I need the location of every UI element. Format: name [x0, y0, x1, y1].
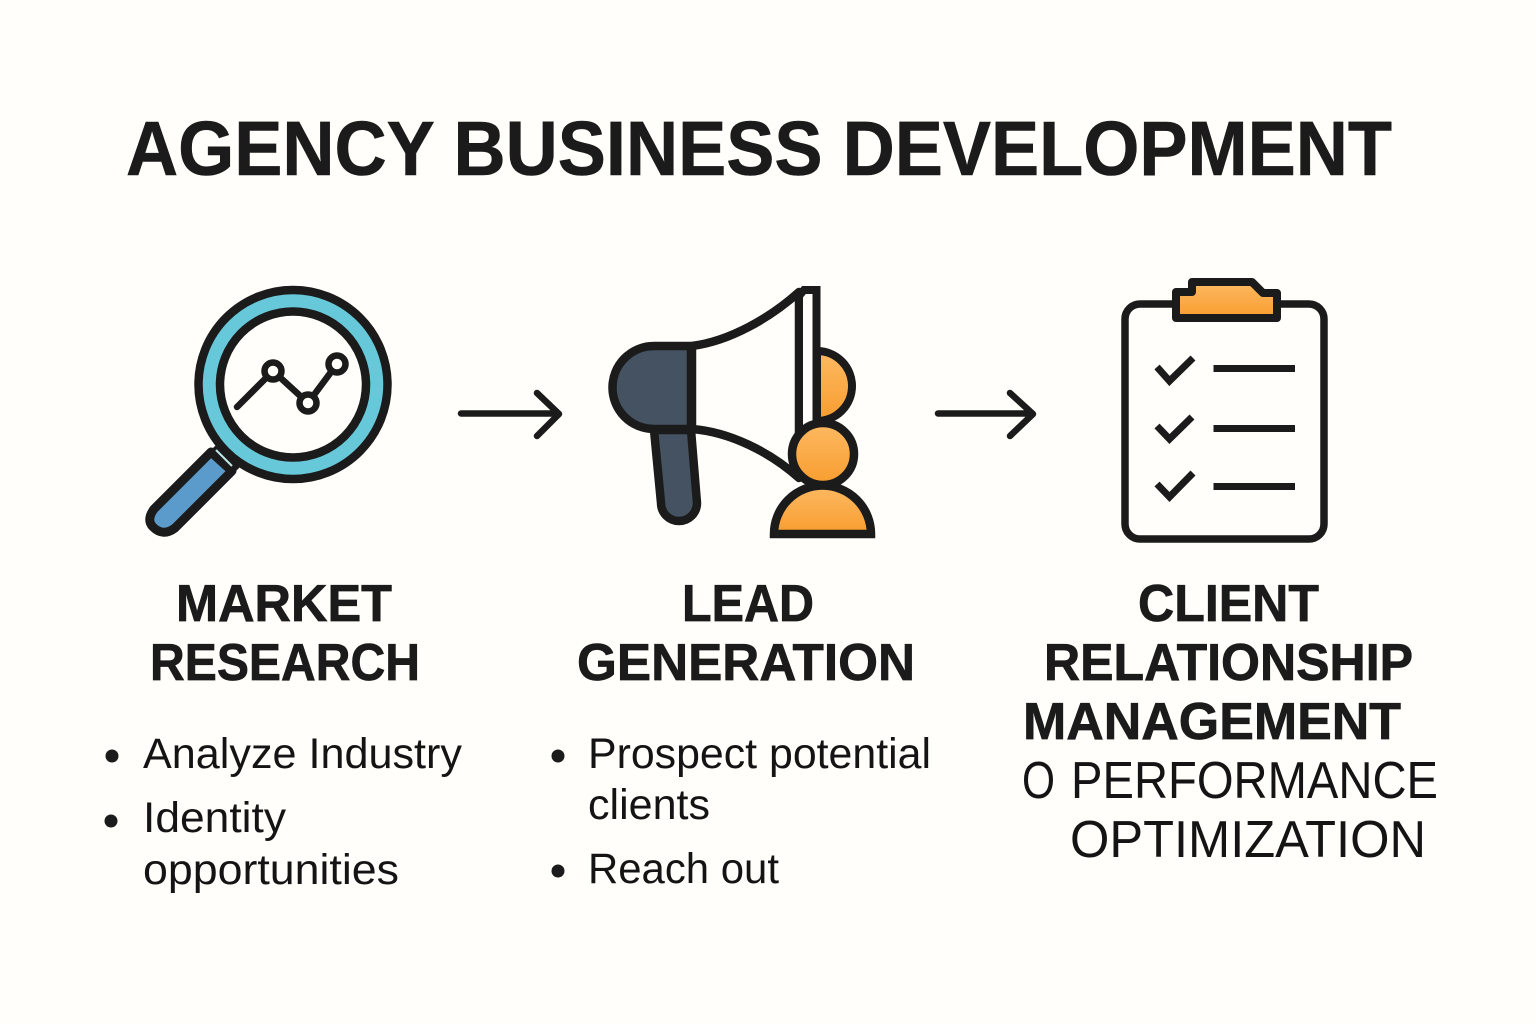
sub-item: performance optimization: O [1022, 752, 1055, 810]
person body [774, 486, 871, 534]
line chart in lens [237, 356, 346, 412]
list: market research: Identity [143, 794, 287, 842]
megaphone horn [692, 292, 799, 478]
person head behind megaphone [817, 351, 852, 421]
heading: lead generation: LEAD [682, 575, 814, 633]
list: market research [104, 730, 462, 894]
clipboard board [1125, 304, 1324, 539]
icon: clipboard checklist [1125, 282, 1324, 539]
heading: lead generation: GENERATION [577, 634, 915, 692]
heading: client relationship management: MANAGEMENT [1023, 693, 1401, 751]
heading: client relationship management: CLIENT [1138, 575, 1319, 633]
checklist row 3 [1157, 473, 1295, 497]
megaphone handle [654, 430, 697, 521]
clipboard clip [1176, 282, 1277, 318]
heading: lead generation [577, 575, 915, 692]
list: lead generation: Reach out [588, 845, 779, 893]
list: lead generation: clients [588, 781, 710, 829]
heading: market research [150, 575, 420, 692]
list: market research: opportunities [143, 846, 399, 894]
heading: market research: MARKET [176, 575, 392, 633]
magnifier handle [150, 448, 236, 532]
sub-item: performance optimization: PERFORMANCE [1071, 752, 1438, 810]
list: market research: Analyze Industry [143, 730, 462, 778]
sub-item: performance optimization: OPTIMIZATION [1070, 811, 1426, 869]
arrow: leads to clients [938, 393, 1033, 436]
list: lead generation: Prospect potential [588, 730, 931, 778]
heading: client relationship management [1023, 575, 1413, 751]
checklist row 1 [1157, 358, 1295, 381]
sub-item: performance optimization [1022, 752, 1438, 869]
person head [792, 423, 854, 485]
megaphone body [612, 346, 691, 429]
heading: market research: RESEARCH [150, 634, 420, 692]
icon: megaphone with people [612, 290, 871, 534]
magnifier lens ring [209, 300, 377, 468]
heading: client relationship management: RELATIONSHIP [1044, 634, 1413, 692]
title: AGENCY BUSINESS DEVELOPMENT [126, 106, 1392, 192]
arrow: research to leads [461, 393, 559, 436]
list: lead generation [552, 730, 931, 893]
icon: magnifying glass with line chart [150, 290, 388, 532]
checklist row 2 [1157, 417, 1295, 439]
megaphone rim [799, 290, 816, 450]
